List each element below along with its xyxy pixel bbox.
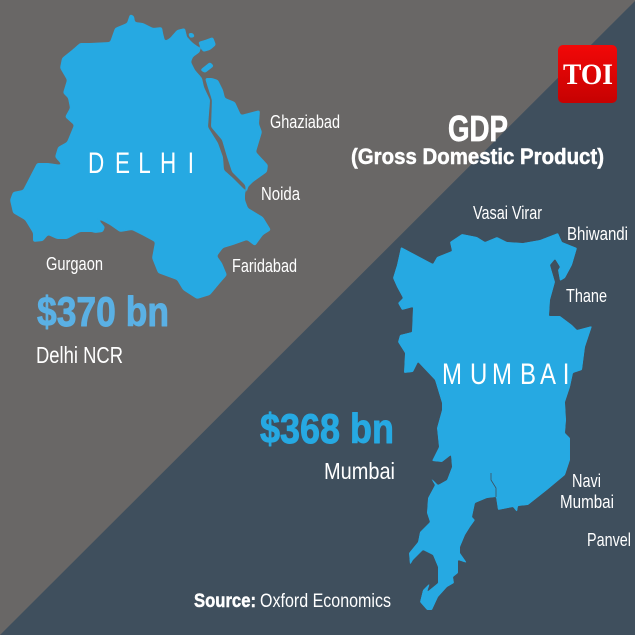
logo: TOI: TOI	[563, 58, 613, 91]
city labels: Delhi region	[46, 112, 340, 276]
stat: Delhi NCR GDP	[36, 288, 169, 368]
city labels: Mumbai region	[473, 203, 631, 550]
label: MUMBAI: MUMBAI	[442, 356, 569, 391]
map: Mumbai	[393, 233, 592, 610]
source: Oxford Economics	[260, 590, 391, 612]
stat: Delhi NCR GDP: Delhi NCR	[36, 342, 123, 368]
logo: TOI	[558, 45, 617, 103]
stat: Delhi NCR GDP: $370 bn	[37, 288, 169, 335]
map: Delhi	[10, 14, 271, 299]
stat: Mumbai GDP: Mumbai	[324, 458, 395, 484]
city labels: Mumbai region: Vasai Virar	[473, 203, 542, 223]
label: DELHI: DELHI	[88, 146, 194, 180]
city labels: Delhi region: Ghaziabad	[270, 112, 340, 132]
city labels: Delhi region: Faridabad	[232, 256, 297, 276]
city labels: Mumbai region: Mumbai	[560, 492, 614, 512]
city labels: Delhi region: Noida	[261, 184, 301, 204]
stat: Mumbai GDP: $368 bn	[260, 405, 394, 452]
title: GDP: (Gross Domestic Product)	[351, 144, 604, 169]
title: GDP	[351, 108, 604, 169]
stat: Mumbai GDP	[260, 405, 395, 484]
source	[194, 590, 391, 612]
city labels: Mumbai region: Thane	[566, 286, 607, 306]
city labels: Delhi region: Gurgaon	[46, 254, 103, 274]
source: Source:	[194, 590, 256, 612]
title: GDP: GDP	[448, 108, 508, 149]
city labels: Mumbai region: Navi	[572, 471, 601, 491]
